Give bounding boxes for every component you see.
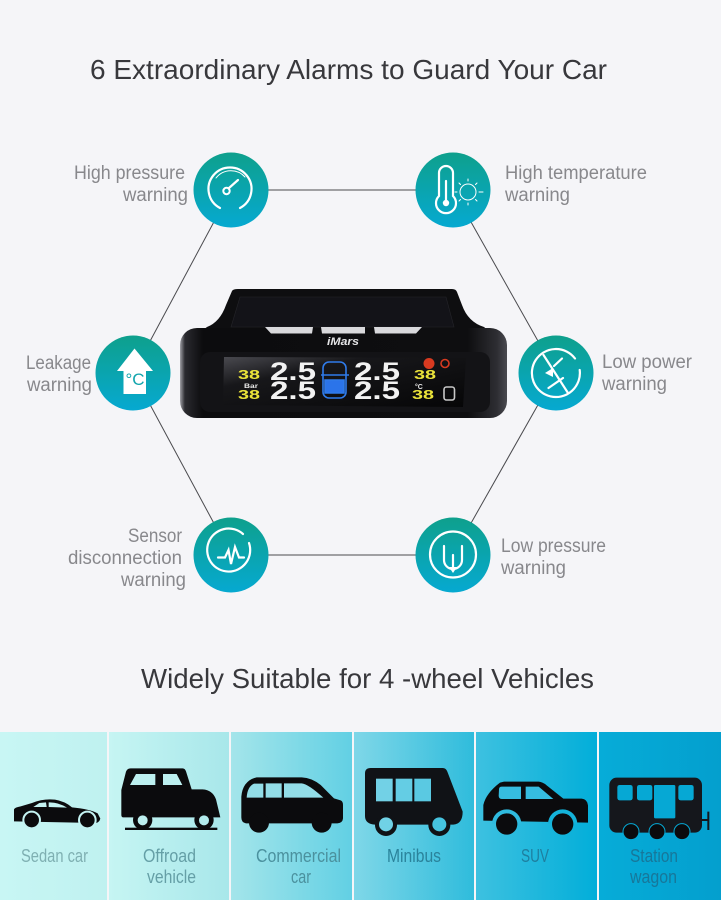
circle bbox=[416, 152, 490, 228]
icon: crossed bluetooth bbox=[532, 349, 580, 397]
circle bbox=[194, 152, 268, 228]
label: High pressure bbox=[74, 163, 185, 184]
screen readings: 2.5 bbox=[270, 377, 316, 405]
icon: gauge bbox=[208, 167, 251, 208]
label: Station bbox=[630, 846, 678, 866]
screen readings: 38 bbox=[412, 387, 434, 402]
label bbox=[68, 526, 186, 591]
screen readings: °C bbox=[415, 383, 423, 391]
panel: offroad vehicle bbox=[109, 732, 229, 900]
alarm: low power warning bbox=[518, 336, 693, 410]
label: Offroad bbox=[143, 846, 196, 866]
label: wagon bbox=[629, 867, 677, 887]
circle bbox=[518, 336, 594, 410]
panel: SUV bbox=[476, 732, 597, 900]
label: warning bbox=[120, 570, 186, 591]
alarm: leakage warning bbox=[26, 336, 170, 410]
screen readings: 2.5 bbox=[270, 358, 316, 386]
label: Commercial bbox=[256, 846, 341, 866]
label: warning bbox=[504, 185, 570, 206]
alarm: high temperature warning bbox=[416, 152, 647, 228]
icon: minibus bbox=[365, 768, 463, 836]
icon: tyre pressure bbox=[430, 532, 476, 578]
brand logo: iMars bbox=[327, 336, 359, 348]
alarm: high pressure warning bbox=[74, 152, 268, 228]
label: car bbox=[291, 867, 311, 887]
panel: sedan car bbox=[0, 732, 107, 900]
panel: minibus bbox=[354, 732, 474, 900]
alarm: low pressure warning bbox=[416, 518, 606, 592]
icon: house arrow bbox=[117, 348, 153, 394]
circle bbox=[194, 518, 268, 592]
label bbox=[143, 846, 196, 887]
title: alarms: 6 Extraordinary Alarms to Guard Your Car bbox=[90, 54, 607, 85]
label: Minibus bbox=[387, 846, 441, 866]
label: warning bbox=[601, 374, 667, 395]
screen readings: 38 bbox=[238, 387, 260, 402]
label: disconnection bbox=[68, 548, 182, 569]
solar cells bbox=[231, 297, 454, 327]
label: Low pressure bbox=[501, 536, 606, 557]
screen readings bbox=[238, 358, 436, 405]
front recess bbox=[200, 352, 490, 412]
silver buttons bbox=[265, 327, 422, 334]
title: vehicles: Widely Suitable for 4 -wheel Vehicles bbox=[141, 663, 594, 694]
screen readings: 2.5 bbox=[354, 377, 400, 405]
product: TPMS device bbox=[180, 289, 507, 418]
screen readings: 38 bbox=[238, 367, 260, 382]
label: warning bbox=[26, 375, 92, 396]
icon: pulse in ring bbox=[207, 529, 250, 572]
screen car icon bbox=[321, 362, 349, 398]
icon: thermometer and sun bbox=[436, 166, 483, 213]
screen readings: 38 bbox=[414, 367, 436, 382]
label bbox=[74, 163, 188, 206]
icon: commercial van bbox=[241, 777, 343, 833]
hexagon connector lines bbox=[133, 190, 556, 555]
label bbox=[629, 846, 678, 887]
label bbox=[256, 846, 341, 887]
icon: sedan bbox=[14, 799, 100, 829]
label bbox=[504, 163, 647, 206]
label bbox=[26, 353, 92, 396]
icon: offroad bbox=[121, 768, 220, 830]
label bbox=[601, 352, 693, 395]
label: Sedan car bbox=[21, 846, 88, 866]
icon: station wagon trailer bbox=[609, 778, 708, 840]
screen readings: 2.5 bbox=[354, 358, 400, 386]
screen vehicle indicator bbox=[444, 387, 454, 400]
label: SUV bbox=[521, 846, 549, 866]
icon: SUV bbox=[483, 782, 588, 839]
screen warning lamps bbox=[424, 358, 449, 369]
solar panel housing bbox=[200, 289, 490, 332]
circle bbox=[96, 336, 170, 410]
panel: commercial car bbox=[231, 732, 352, 900]
icon: house arrow: °C bbox=[125, 370, 145, 389]
label: High temperature bbox=[505, 163, 647, 184]
label: Sensor bbox=[128, 526, 183, 547]
label: warning bbox=[500, 558, 566, 579]
circle bbox=[416, 518, 490, 592]
LCD screen bbox=[223, 357, 466, 407]
label bbox=[500, 536, 606, 579]
label: warning bbox=[122, 185, 188, 206]
alarm: sensor disconnection warning bbox=[68, 518, 268, 592]
label: Leakage bbox=[26, 353, 91, 374]
label: Low power bbox=[602, 352, 693, 373]
label: vehicle bbox=[147, 867, 196, 887]
screen readings: Bar bbox=[244, 384, 259, 390]
panel: station wagon bbox=[599, 732, 721, 900]
device body bbox=[180, 328, 507, 418]
